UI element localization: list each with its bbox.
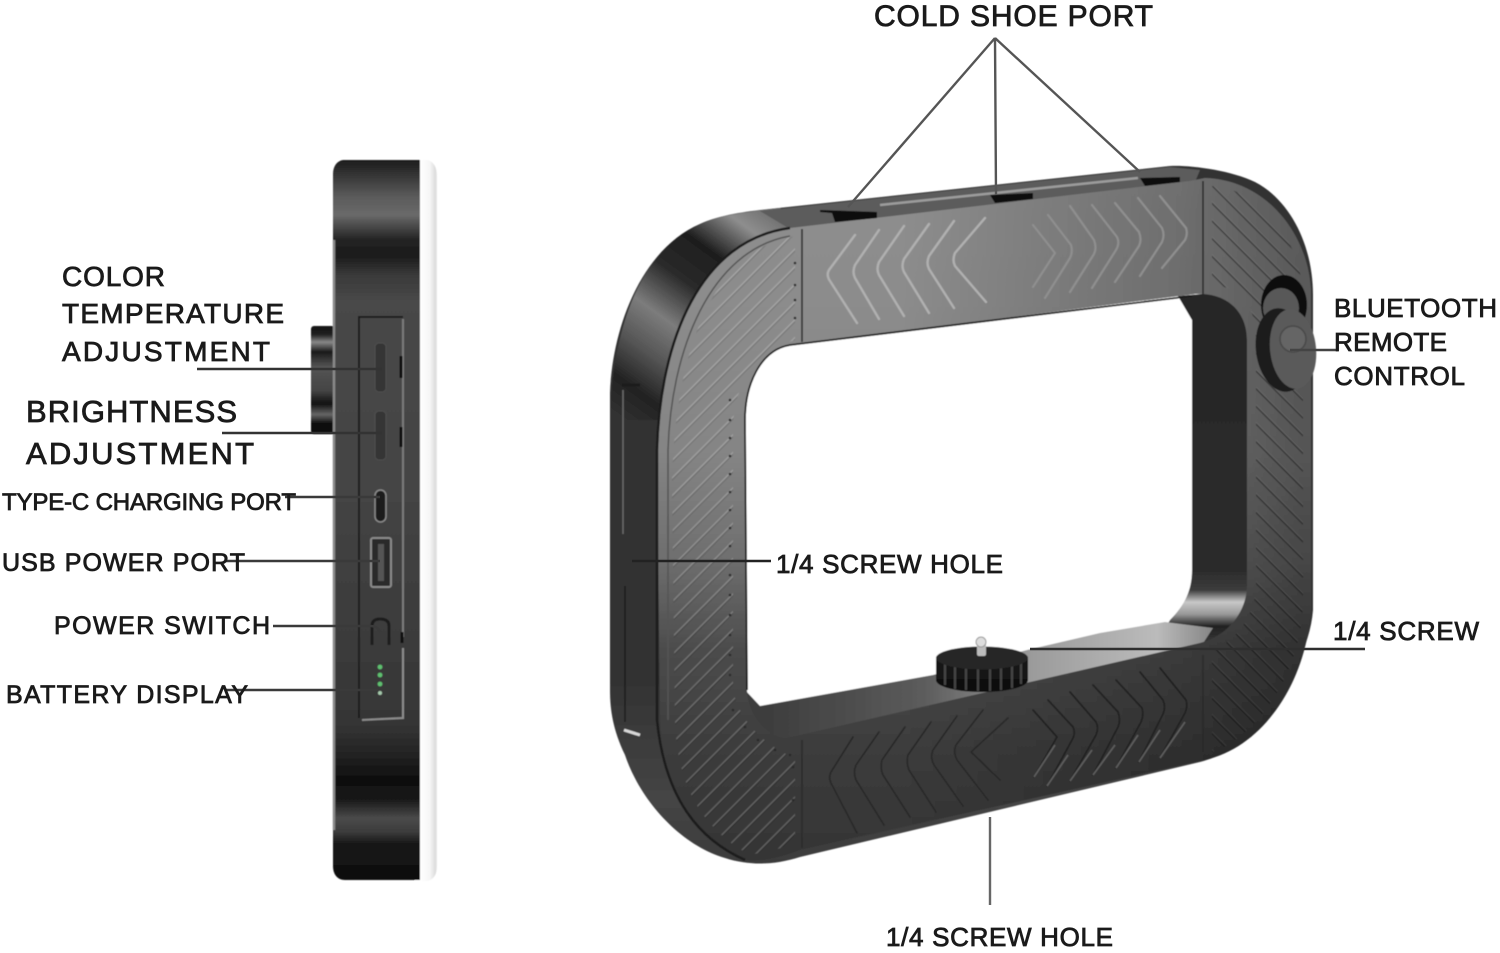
label: bluetooth remote control: REMOTE bbox=[1334, 327, 1447, 357]
color temperature button bbox=[375, 343, 386, 392]
side view of light bbox=[311, 160, 437, 881]
top left chevrons bbox=[828, 218, 986, 323]
battery indicator lights bbox=[378, 665, 382, 695]
label: side screw hole: 1/4 SCREW HOLE bbox=[776, 549, 1003, 579]
bottom left chevrons bbox=[830, 710, 1008, 833]
bottom right chevrons bbox=[1033, 668, 1187, 786]
label: color temperature adjustment bbox=[62, 261, 284, 367]
control panel outline bbox=[359, 317, 403, 720]
light lower rib strokes bbox=[1034, 722, 1185, 786]
label: quarter inch screw: 1/4 SCREW bbox=[1333, 616, 1479, 646]
perforated dots bbox=[729, 262, 796, 801]
side dial knob bbox=[311, 326, 335, 434]
label: bluetooth remote control: CONTROL bbox=[1334, 361, 1465, 391]
side housing bbox=[333, 160, 420, 880]
label: color temperature adjustment: COLOR bbox=[62, 261, 165, 292]
cold shoe ports bbox=[820, 177, 1180, 222]
label: battery display: BATTERY DISPLAY bbox=[6, 681, 248, 709]
brightness button bbox=[375, 411, 386, 460]
ring light frame bbox=[610, 166, 1320, 864]
label: power switch: POWER SWITCH bbox=[54, 612, 270, 640]
left side slots bbox=[622, 385, 640, 735]
inner opening bbox=[740, 290, 1250, 742]
power switch bbox=[372, 619, 389, 645]
top edge highlight bbox=[760, 167, 1200, 229]
seams between grips bbox=[802, 181, 1203, 848]
label: cold shoe port: COLD SHOE PORT bbox=[874, 0, 1153, 33]
label: bluetooth remote control bbox=[1334, 293, 1497, 391]
type-c port bbox=[375, 490, 386, 522]
label: usb power port: USB POWER PORT bbox=[2, 549, 245, 577]
bluetooth remote control bbox=[1250, 275, 1320, 395]
top right chevrons bbox=[1033, 196, 1187, 298]
usb port bbox=[371, 538, 391, 587]
hatching on left and right grips bbox=[672, 186, 1303, 855]
front face bbox=[657, 178, 1311, 861]
frame silhouette bbox=[610, 166, 1313, 864]
label: brightness adjustment: ADJUSTMENT bbox=[26, 436, 254, 471]
quarter inch screw knob bbox=[936, 637, 1028, 692]
label: bottom screw hole: 1/4 SCREW HOLE bbox=[886, 922, 1113, 952]
side housing left rim bbox=[333, 240, 335, 830]
label: color temperature adjustment: ADJUSTMENT bbox=[62, 336, 270, 367]
rounded corner highlight bbox=[610, 208, 800, 420]
label: brightness adjustment bbox=[26, 394, 254, 471]
label: color temperature adjustment: TEMPERATURE bbox=[62, 298, 284, 329]
callout leader lines bbox=[197, 38, 1365, 905]
label: bluetooth remote control: BLUETOOTH bbox=[1334, 293, 1497, 323]
inner right wall bbox=[1150, 290, 1250, 655]
label: brightness adjustment: BRIGHTNESS bbox=[26, 394, 237, 429]
label: type-c charging port: TYPE-C CHARGING PORT bbox=[2, 489, 296, 516]
dark rims on face and opening bbox=[657, 228, 1192, 860]
white light panel edge bbox=[415, 160, 437, 881]
inner floor bbox=[745, 622, 1213, 742]
